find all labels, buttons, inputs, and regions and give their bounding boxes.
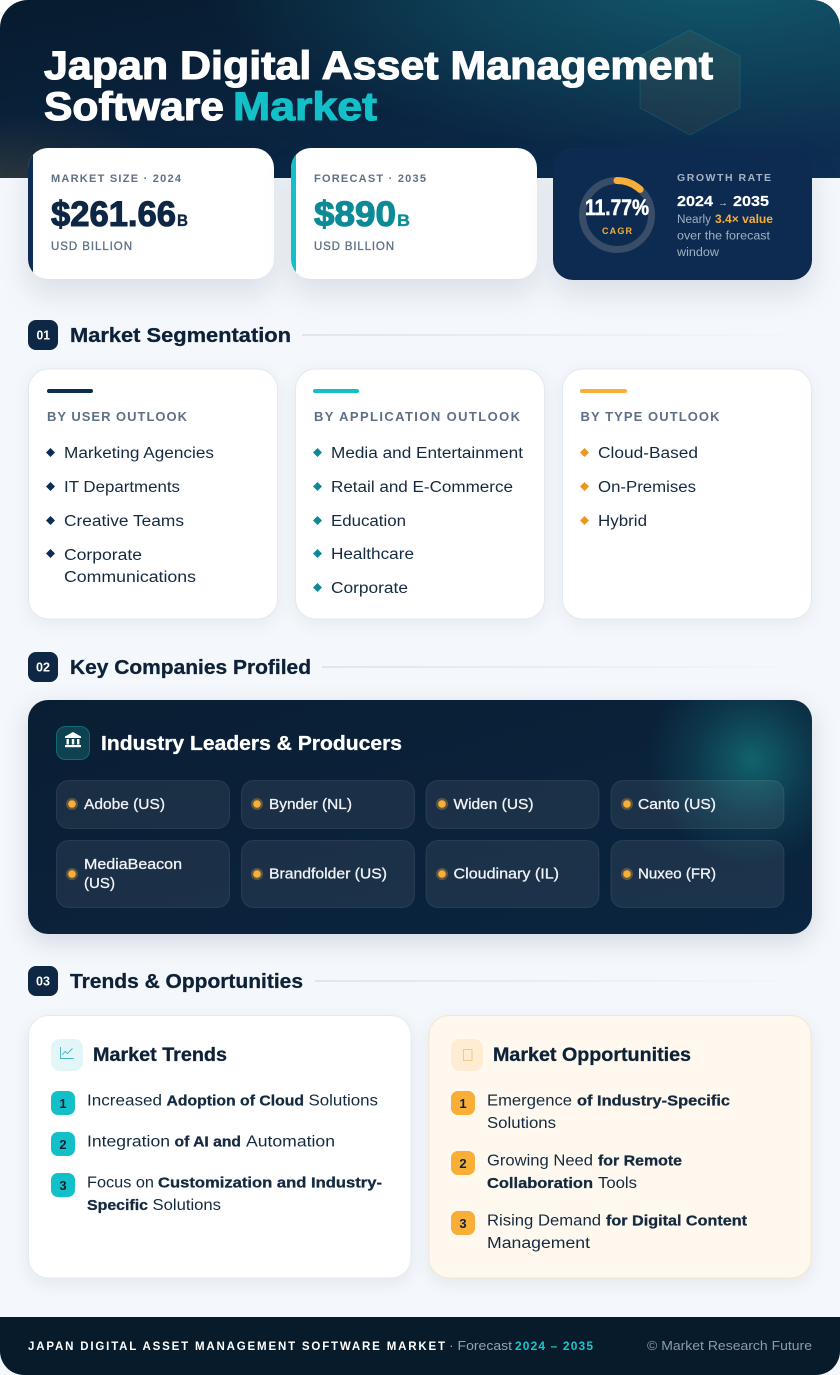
opportunity 1: 1 bbox=[459, 1096, 467, 1111]
trend 2: Automation bbox=[246, 1134, 335, 1150]
trend 1: Adoption of Cloud bbox=[166, 1092, 304, 1110]
panel: by user outlook bbox=[28, 369, 278, 619]
opportunity 2 bbox=[451, 1151, 682, 1192]
trend 3: Focus on bbox=[87, 1174, 154, 1192]
footer bbox=[0, 1317, 840, 1375]
section heading 03 bbox=[28, 966, 812, 996]
panel: by user outlook: Creative Teams bbox=[64, 513, 184, 530]
trend 2: 2 bbox=[59, 1137, 67, 1152]
panel: by application outlook: Retail and E-Commerce bbox=[331, 479, 513, 496]
title bbox=[44, 44, 713, 129]
title: Market bbox=[233, 85, 377, 129]
stat card: market size 2024: USD BILLION bbox=[51, 241, 132, 253]
opportunity 3: for Digital Content bbox=[606, 1212, 747, 1230]
growth rate text: GROWTH RATE bbox=[677, 172, 771, 184]
stat card: market size 2024 bbox=[28, 148, 274, 279]
panel: by type outlook: Cloud-Based bbox=[598, 445, 698, 462]
trend 3: Solutions bbox=[152, 1197, 221, 1214]
section heading 02: 02 bbox=[36, 660, 50, 674]
panel: market trends bbox=[28, 1016, 411, 1278]
panel: by user outlook: BY USER OUTLOOK bbox=[47, 409, 188, 424]
company: Nuxeo bbox=[611, 840, 784, 908]
opportunity 2: Growing Need bbox=[487, 1152, 593, 1170]
section heading 01: 01 bbox=[36, 328, 50, 342]
company: Widen bbox=[426, 780, 599, 828]
panel heading: Industry Leaders & Producers bbox=[101, 733, 402, 755]
trend 2 bbox=[51, 1132, 335, 1156]
company: Adobe bbox=[56, 780, 230, 828]
stat card: growth rate bbox=[553, 148, 812, 280]
trend 1 bbox=[51, 1091, 378, 1115]
company: Brandfolder: Brandfolder (US) bbox=[269, 866, 387, 882]
section heading 01: Market Segmentation bbox=[70, 325, 291, 347]
opportunity 2: 2 bbox=[459, 1156, 467, 1171]
panel: by application outlook: BY APPLICATION OUTLOOK bbox=[314, 409, 521, 424]
trend 2: Integration bbox=[87, 1134, 170, 1150]
panel: by application outlook: Healthcare bbox=[331, 546, 414, 563]
panel: by user outlook: Marketing Agencies bbox=[64, 445, 214, 462]
growth rate text: Nearly bbox=[677, 214, 711, 226]
company: Nuxeo: Nuxeo (FR) bbox=[638, 866, 716, 882]
trend 3: Specific bbox=[87, 1197, 148, 1214]
donut chart: 11.77% CAGR bbox=[582, 180, 652, 250]
stat card: market size 2024: B bbox=[177, 211, 188, 230]
growth rate text bbox=[676, 172, 773, 259]
icon: line chart bbox=[51, 1039, 83, 1071]
stat card: market size 2024: MARKET SIZE · 2024 bbox=[51, 173, 182, 185]
opportunity 2: Collaboration bbox=[487, 1175, 593, 1192]
section heading 03: Trends & Opportunities bbox=[70, 971, 303, 993]
trend 3: Customization and Industry- bbox=[158, 1174, 382, 1192]
trend 2: of AI and bbox=[174, 1134, 241, 1150]
trend 1: Solutions bbox=[308, 1092, 378, 1110]
growth rate text: 2024 bbox=[677, 193, 714, 210]
opportunity 1: of Industry-Specific bbox=[577, 1092, 730, 1110]
section heading 02 bbox=[28, 652, 812, 682]
panel: market opportunities bbox=[429, 1016, 811, 1278]
footer: © Market Research Future bbox=[647, 1339, 812, 1353]
company: Bynder: Bynder (NL) bbox=[269, 797, 352, 813]
company: MediaBeacon: MediaBeacon bbox=[84, 857, 182, 873]
panel: by type outlook bbox=[562, 369, 812, 619]
panel: by application outlook: Media and Entertainment bbox=[331, 445, 524, 462]
opportunity 3: Management bbox=[487, 1235, 591, 1252]
stat card: forecast 2035: FORECAST · 2035 bbox=[314, 173, 426, 185]
stat card: forecast 2035: $890 bbox=[314, 195, 396, 234]
company: Canto: Canto (US) bbox=[638, 797, 716, 813]
panel: by application outlook: Corporate bbox=[331, 580, 408, 597]
opportunity 2: for Remote bbox=[598, 1152, 682, 1170]
trend 1: 1 bbox=[59, 1096, 67, 1111]
stat card: market size 2024: $261.66 bbox=[51, 195, 176, 234]
trend 3 bbox=[51, 1173, 382, 1214]
panel: by user outlook: IT Departments bbox=[64, 479, 180, 496]
opportunity 3 bbox=[451, 1211, 747, 1252]
title: Japan Digital Asset Management bbox=[44, 44, 713, 88]
company: Bynder bbox=[242, 780, 414, 828]
panel: by application outlook bbox=[296, 369, 544, 619]
footer: JAPAN DIGITAL ASSET MANAGEMENT SOFTWARE MARKET bbox=[28, 1341, 445, 1353]
company: Brandfolder bbox=[242, 840, 414, 908]
company: MediaBeacon: (US) bbox=[84, 876, 115, 892]
opportunity 1: Emergence bbox=[487, 1092, 572, 1110]
company: Cloudinary: Cloudinary (IL) bbox=[454, 866, 559, 882]
growth rate text: window bbox=[676, 247, 720, 259]
opportunity 1 bbox=[451, 1091, 730, 1132]
panel: by user outlook: Corporate bbox=[64, 547, 142, 564]
company: Canto bbox=[611, 780, 784, 828]
panel: industry leaders bbox=[28, 700, 812, 934]
donut chart: 11.77% CAGR: 11.77% bbox=[585, 195, 649, 220]
growth rate text: 2035 bbox=[733, 193, 769, 210]
company: MediaBeacon bbox=[56, 840, 230, 908]
footer: · Forecast bbox=[449, 1339, 513, 1353]
panel: by application outlook: Education bbox=[331, 513, 406, 530]
panel: by type outlook: BY TYPE OUTLOOK bbox=[580, 409, 720, 424]
icon: missing glyph box bbox=[451, 1039, 483, 1071]
trend 3: 3 bbox=[59, 1178, 67, 1193]
footer: 2024 – 2035 bbox=[515, 1339, 593, 1353]
section heading 02: Key Companies Profiled bbox=[70, 657, 311, 679]
company: Adobe: Adobe (US) bbox=[84, 797, 165, 813]
section heading 03: 03 bbox=[36, 974, 50, 988]
stat card: forecast 2035 bbox=[291, 148, 537, 279]
company: Widen: Widen (US) bbox=[454, 797, 534, 813]
panel: by type outlook: On-Premises bbox=[598, 479, 696, 496]
panel: by type outlook: Hybrid bbox=[598, 513, 647, 530]
icon: bank bbox=[56, 726, 90, 760]
opportunity 2: Tools bbox=[598, 1175, 637, 1192]
panel: by user outlook: Communications bbox=[64, 569, 196, 586]
header banner bbox=[0, 0, 840, 178]
opportunity 3: 3 bbox=[459, 1216, 467, 1231]
growth rate text: → bbox=[718, 197, 728, 209]
section heading 01 bbox=[28, 320, 812, 350]
heading: Market Opportunities bbox=[493, 1045, 691, 1066]
company: Cloudinary bbox=[426, 840, 599, 908]
opportunity 1: Solutions bbox=[487, 1115, 556, 1132]
stat card: forecast 2035: USD BILLION bbox=[314, 241, 394, 253]
growth rate text: 3.4× value bbox=[715, 214, 773, 226]
heading: Market Trends bbox=[93, 1045, 227, 1066]
title: Software bbox=[44, 85, 224, 129]
trend 1: Increased bbox=[87, 1092, 162, 1110]
stat card: forecast 2035: B bbox=[397, 211, 410, 230]
growth rate text: over the forecast bbox=[677, 230, 771, 242]
opportunity 3: Rising Demand bbox=[487, 1212, 601, 1230]
donut chart: 11.77% CAGR: CAGR bbox=[602, 226, 632, 236]
